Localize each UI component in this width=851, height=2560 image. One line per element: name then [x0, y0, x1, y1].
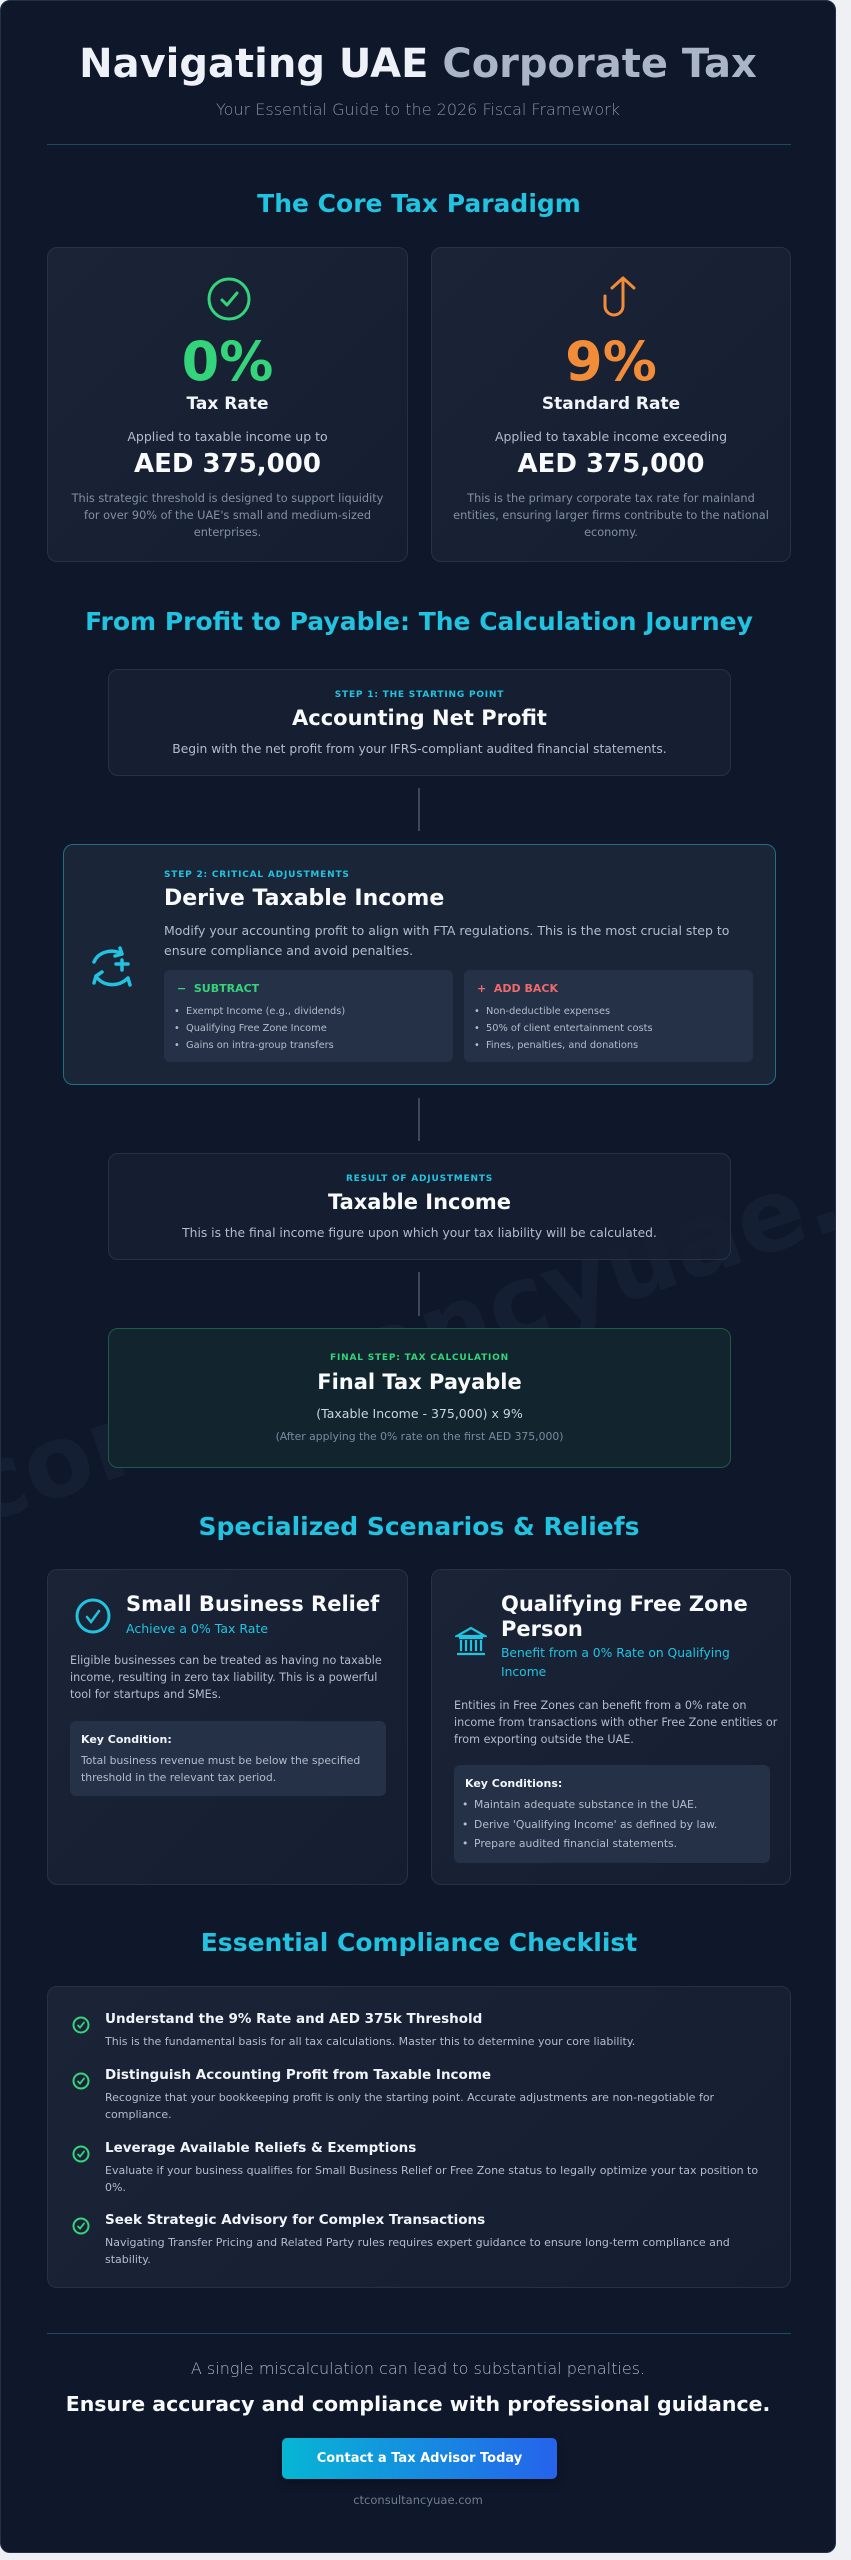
- subtract box: Gains on intra-group transfers: [186, 1040, 334, 1051]
- heading: core tax paradigm: The Core Tax Paradigm: [257, 189, 581, 218]
- step 2 box: Modify your accounting profit to align with FTA regulations. This is the most crucial step to ensure compliance and avoid penalties.: [164, 923, 729, 958]
- add back box: 50% of client entertainment costs: [486, 1023, 653, 1034]
- key conditions box: Derive 'Qualifying Income' as defined by law.: [474, 1818, 717, 1830]
- result box: taxable income: Taxable Income: [328, 1190, 511, 1214]
- heading: checklist: Essential Compliance Checklist: [201, 1928, 637, 1957]
- icon: bank building: [455, 1626, 487, 1656]
- panel: 0% tax rate: [47, 247, 408, 562]
- panel: 0% tax rate: Tax Rate: [186, 394, 268, 414]
- key condition box: Total business revenue must be below the specified threshold in the relevant tax period.: [81, 1754, 360, 1784]
- step 2 box: [63, 844, 776, 1085]
- panel: 0% tax rate: AED 375,000: [134, 449, 321, 479]
- step 1 box: [108, 669, 731, 776]
- title: Navigating UAE Corporate Tax: [79, 41, 757, 87]
- panel: 9% standard rate: Applied to taxable income exceeding: [495, 429, 727, 444]
- final box: tax payable: [108, 1328, 731, 1468]
- footer url: ctconsultancyuae.com: [353, 2493, 483, 2507]
- step 1 box: Begin with the net profit from your IFRS-compliant audited financial statements.: [172, 742, 667, 756]
- key conditions box: Prepare audited financial statements.: [474, 1837, 677, 1850]
- result box: taxable income: [108, 1153, 731, 1260]
- step 1 box: Accounting Net Profit: [292, 706, 547, 730]
- key condition box: Key Condition:: [81, 1733, 172, 1746]
- add back box: Fines, penalties, and donations: [486, 1040, 638, 1051]
- key conditions box: [454, 1765, 770, 1863]
- final box: tax payable: (Taxable Income - 375,000) x 9%: [316, 1406, 523, 1421]
- panel: 9% standard rate: AED 375,000: [518, 449, 704, 479]
- subtract box: [164, 970, 453, 1062]
- item 1: [72, 2011, 635, 2048]
- panel: 9% standard rate: Standard Rate: [542, 394, 680, 414]
- panel: free zone person: [431, 1569, 791, 1885]
- item 2: [72, 2067, 714, 2121]
- panel: small business relief: Achieve a 0% Tax Rate: [126, 1621, 268, 1636]
- subtract box: Qualifying Free Zone Income: [186, 1023, 327, 1034]
- item 4: [72, 2212, 730, 2266]
- final box: tax payable: FINAL STEP: TAX CALCULATION: [330, 1353, 509, 1363]
- step 2 box: STEP 2: CRITICAL ADJUSTMENTS: [164, 870, 350, 880]
- button: contact: [282, 2438, 557, 2479]
- panel: small business relief: Small Business Relief: [126, 1592, 379, 1616]
- panel: 0% tax rate: Applied to taxable income up to: [127, 429, 328, 444]
- panel: free zone person: Qualifying Free Zone Person: [501, 1592, 748, 1641]
- button: contact: Contact a Tax Advisor Today: [317, 2451, 522, 2466]
- panel: checklist: Distinguish Accounting Profit from Taxable Income: [105, 2067, 491, 2083]
- add back box: Non-deductible expenses: [486, 1006, 610, 1017]
- heading: calculation journey: From Profit to Payable: The Calculation Journey: [85, 607, 753, 636]
- step 2 box: Derive Taxable Income: [164, 886, 444, 911]
- subtract box: Exempt Income (e.g., dividends): [186, 1006, 345, 1017]
- item 3: [72, 2140, 758, 2194]
- key conditions box: Maintain adequate substance in the UAE.: [474, 1798, 697, 1811]
- final box: tax payable: Final Tax Payable: [317, 1370, 522, 1394]
- panel: free zone person: Entities in Free Zones can benefit from a 0% rate on income from transactions with other Free Zone entities or from exporting outside the UAE.: [454, 1699, 777, 1746]
- icon: green check circle: [208, 278, 250, 320]
- panel: 0% tax rate: 0%: [182, 330, 273, 393]
- panel: checklist: Evaluate if your business qualifies for Small Business Relief or Free Zone status to legally optimize your tax position to 0%.: [105, 2164, 758, 2194]
- panel: small business relief: [47, 1569, 408, 1885]
- key condition box: [70, 1721, 386, 1796]
- footer bold statement: Ensure accuracy and compliance with professional guidance.: [66, 2392, 770, 2416]
- panel: checklist: This is the fundamental basis for all tax calculations. Master this to determine your core liability.: [105, 2035, 635, 2048]
- panel: checklist: [47, 1986, 791, 2288]
- panel: 0% tax rate: This strategic threshold is designed to support liquidity for over 90% of the UAE's small and medium-sized enterprises.: [72, 492, 383, 539]
- icon: orange up arrow: [604, 276, 636, 316]
- panel: checklist: Leverage Available Reliefs & Exemptions: [105, 2140, 416, 2156]
- result box: taxable income: RESULT OF ADJUSTMENTS: [346, 1174, 493, 1184]
- add back box: + ADD BACK: [477, 982, 558, 995]
- panel: checklist: Navigating Transfer Pricing and Related Party rules requires expert guidance to ensure long-term compliance and stability.: [105, 2236, 730, 2266]
- panel: checklist: Understand the 9% Rate and AED 375k Threshold: [105, 2011, 482, 2027]
- subtract box: − SUBTRACT: [177, 982, 259, 995]
- subtitle: Your Essential Guide to the 2026 Fiscal Framework: [216, 100, 620, 119]
- panel: 9% standard rate: [431, 247, 791, 562]
- key conditions box: Key Conditions:: [465, 1777, 562, 1790]
- panel: 9% standard rate: 9%: [565, 330, 657, 393]
- final box: tax payable: (After applying the 0% rate on the first AED 375,000): [276, 1430, 563, 1443]
- panel: small business relief: Eligible businesses can be treated as having no taxable income, resulting in zero tax liability. This is a powerful tool for startups and SMEs.: [70, 1654, 382, 1701]
- add back box: [464, 970, 753, 1062]
- panel: checklist: Seek Strategic Advisory for Complex Transactions: [105, 2212, 485, 2228]
- heading: scenarios: Specialized Scenarios & Reliefs: [198, 1512, 640, 1541]
- panel: 9% standard rate: This is the primary corporate tax rate for mainland entities, ensuring larger firms contribute to the national economy.: [453, 492, 769, 539]
- panel: free zone person: Benefit from a 0% Rate on Qualifying Income: [501, 1646, 730, 1679]
- icon: cyan check circle: [76, 1598, 110, 1634]
- result box: taxable income: This is the final income figure upon which your tax liability will be calculated.: [182, 1226, 657, 1240]
- icon: cycle arrows: [92, 946, 132, 987]
- panel: checklist: Recognize that your bookkeeping profit is only the starting point. Accurate adjustments are non-negotiable for compliance.: [105, 2091, 714, 2121]
- footer warning text: A single miscalculation can lead to substantial penalties.: [191, 2359, 645, 2378]
- step 1 box: STEP 1: THE STARTING POINT: [335, 690, 504, 700]
